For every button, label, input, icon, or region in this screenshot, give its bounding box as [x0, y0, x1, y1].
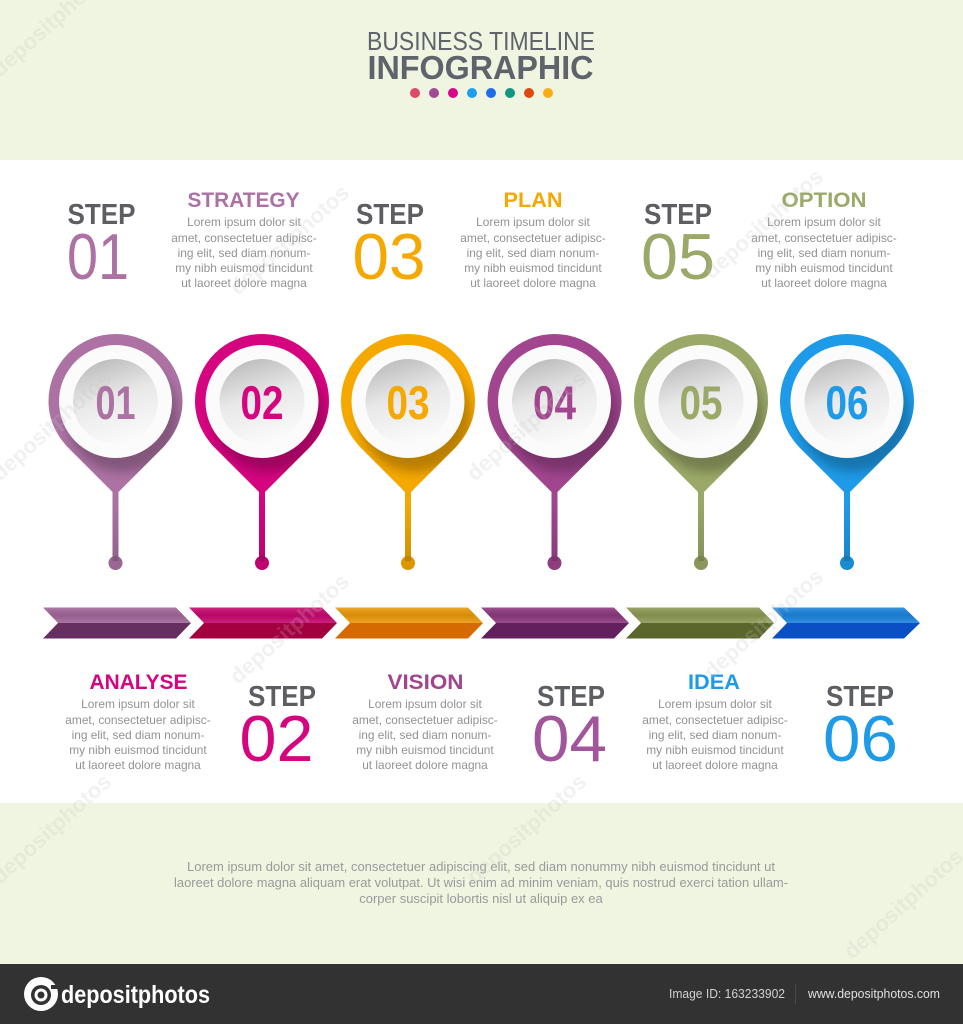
step 03 label: STEP [356, 199, 424, 231]
analyse text block [65, 671, 211, 772]
pin 03 [341, 334, 475, 570]
watermarks: depositphotos [462, 366, 591, 486]
analyse text block: ANALYSE [90, 671, 188, 694]
title: BUSINESS TIMELINE [367, 26, 595, 56]
image id: Image ID: 163233902 [669, 987, 785, 1001]
step 01 label: STEP [68, 199, 136, 231]
pin 06: 06 [826, 376, 868, 429]
option text block: ing elit, sed diam nonum- [758, 246, 890, 260]
analyse text block: amet, consectetuer adipisc- [65, 713, 211, 727]
icon: camera logo [24, 977, 58, 1011]
vision text block [352, 671, 498, 772]
step 05 label: 05 [641, 220, 715, 293]
watermarks: depositphotos [699, 164, 828, 284]
strategy text block: Lorem ipsum dolor sit [187, 215, 302, 229]
plan text block: ing elit, sed diam nonum- [467, 246, 599, 260]
vision text block: VISION [388, 671, 464, 694]
strategy text block: STRATEGY [188, 189, 300, 212]
plan text block: Lorem ipsum dolor sit [476, 215, 591, 229]
idea text block: IDEA [688, 671, 740, 694]
title [367, 26, 595, 86]
idea text block: ing elit, sed diam nonum- [649, 728, 781, 742]
pin 03: 03 [386, 376, 430, 429]
top band background [0, 0, 963, 160]
vision text block: ing elit, sed diam nonum- [359, 728, 491, 742]
step 04 label: 04 [532, 702, 607, 775]
strategy text block: amet, consectetuer adipisc- [171, 231, 317, 245]
step 02 label: STEP [248, 681, 316, 713]
vision text block: Lorem ipsum dolor sit [368, 697, 483, 711]
strategy text block: my nibh euismod tincidunt [175, 261, 313, 275]
idea text block: Lorem ipsum dolor sit [658, 697, 773, 711]
option text block: ut laoreet dolore magna [761, 276, 887, 290]
title colour dots [410, 88, 553, 98]
analyse text block: Lorem ipsum dolor sit [81, 697, 196, 711]
arrow 6 [772, 608, 920, 638]
vision text block: ut laoreet dolore magna [362, 758, 488, 772]
title: INFOGRAPHIC [368, 49, 594, 86]
footer paragraph: corper suscipit lobortis nisl ut aliquip ex ea [359, 891, 604, 906]
depositphotos logo text: depositphotos [61, 981, 210, 1009]
analyse text block: ut laoreet dolore magna [75, 758, 201, 772]
watermarks: depositphotos [225, 569, 354, 689]
watermarks: depositphotos [462, 769, 591, 889]
pin 04: 04 [533, 376, 576, 429]
arrow 3 [335, 608, 483, 638]
strategy text block: ut laoreet dolore magna [181, 276, 307, 290]
option text block [751, 189, 897, 290]
pin 04 [488, 334, 622, 570]
step 03 label: 03 [352, 220, 426, 293]
arrow 5 [626, 608, 774, 638]
watermarks: depositphotos [225, 180, 354, 300]
strategy text block: ing elit, sed diam nonum- [178, 246, 310, 260]
idea text block: my nibh euismod tincidunt [646, 743, 784, 757]
website url: www.depositphotos.com [807, 987, 940, 1001]
strategy text block [171, 189, 317, 290]
pin 02: 02 [240, 376, 284, 429]
idea text block [642, 671, 788, 772]
footer paragraph: laoreet dolore magna aliquam erat volutpat. Ut wisi enim ad minim veniam, quis nostrud exerci tation ullam- [174, 875, 788, 890]
pin 01: 01 [96, 376, 136, 429]
pin 05: 05 [680, 376, 722, 429]
footer paragraph: Lorem ipsum dolor sit amet, consectetuer adipiscing elit, sed diam nonummy nibh euismod tincidunt ut [187, 859, 775, 874]
step 02 label: 02 [240, 702, 314, 775]
step 01 label: 01 [67, 220, 129, 293]
option text block: my nibh euismod tincidunt [755, 261, 893, 275]
pin 05 [634, 334, 768, 570]
pin 01 [48, 334, 182, 570]
idea text block: ut laoreet dolore magna [652, 758, 778, 772]
analyse text block: my nibh euismod tincidunt [69, 743, 207, 757]
option text block: Lorem ipsum dolor sit [767, 215, 882, 229]
analyse text block: ing elit, sed diam nonum- [72, 728, 204, 742]
bottom bar [0, 964, 963, 1024]
step 06 label: STEP [826, 681, 894, 713]
plan text block: my nibh euismod tincidunt [464, 261, 602, 275]
plan text block: amet, consectetuer adipisc- [460, 231, 606, 245]
footer paragraph [174, 859, 788, 906]
vision text block: amet, consectetuer adipisc- [352, 713, 498, 727]
plan text block [460, 189, 606, 290]
step 05 label: STEP [644, 199, 712, 231]
bottom band background [0, 803, 963, 964]
step 06 label: 06 [823, 702, 898, 775]
option text block: amet, consectetuer adipisc- [751, 231, 897, 245]
watermarks: depositphotos [699, 564, 828, 684]
pin 02 [195, 334, 329, 570]
plan text block: PLAN [504, 189, 562, 212]
arrow 1 [43, 608, 191, 638]
plan text block: ut laoreet dolore magna [470, 276, 596, 290]
pin 06 [780, 334, 914, 570]
vision text block: my nibh euismod tincidunt [356, 743, 494, 757]
arrow 4 [481, 608, 629, 638]
arrow 2 [189, 608, 337, 638]
option text block: OPTION [782, 189, 866, 212]
idea text block: amet, consectetuer adipisc- [642, 713, 788, 727]
step 04 label: STEP [537, 681, 605, 713]
